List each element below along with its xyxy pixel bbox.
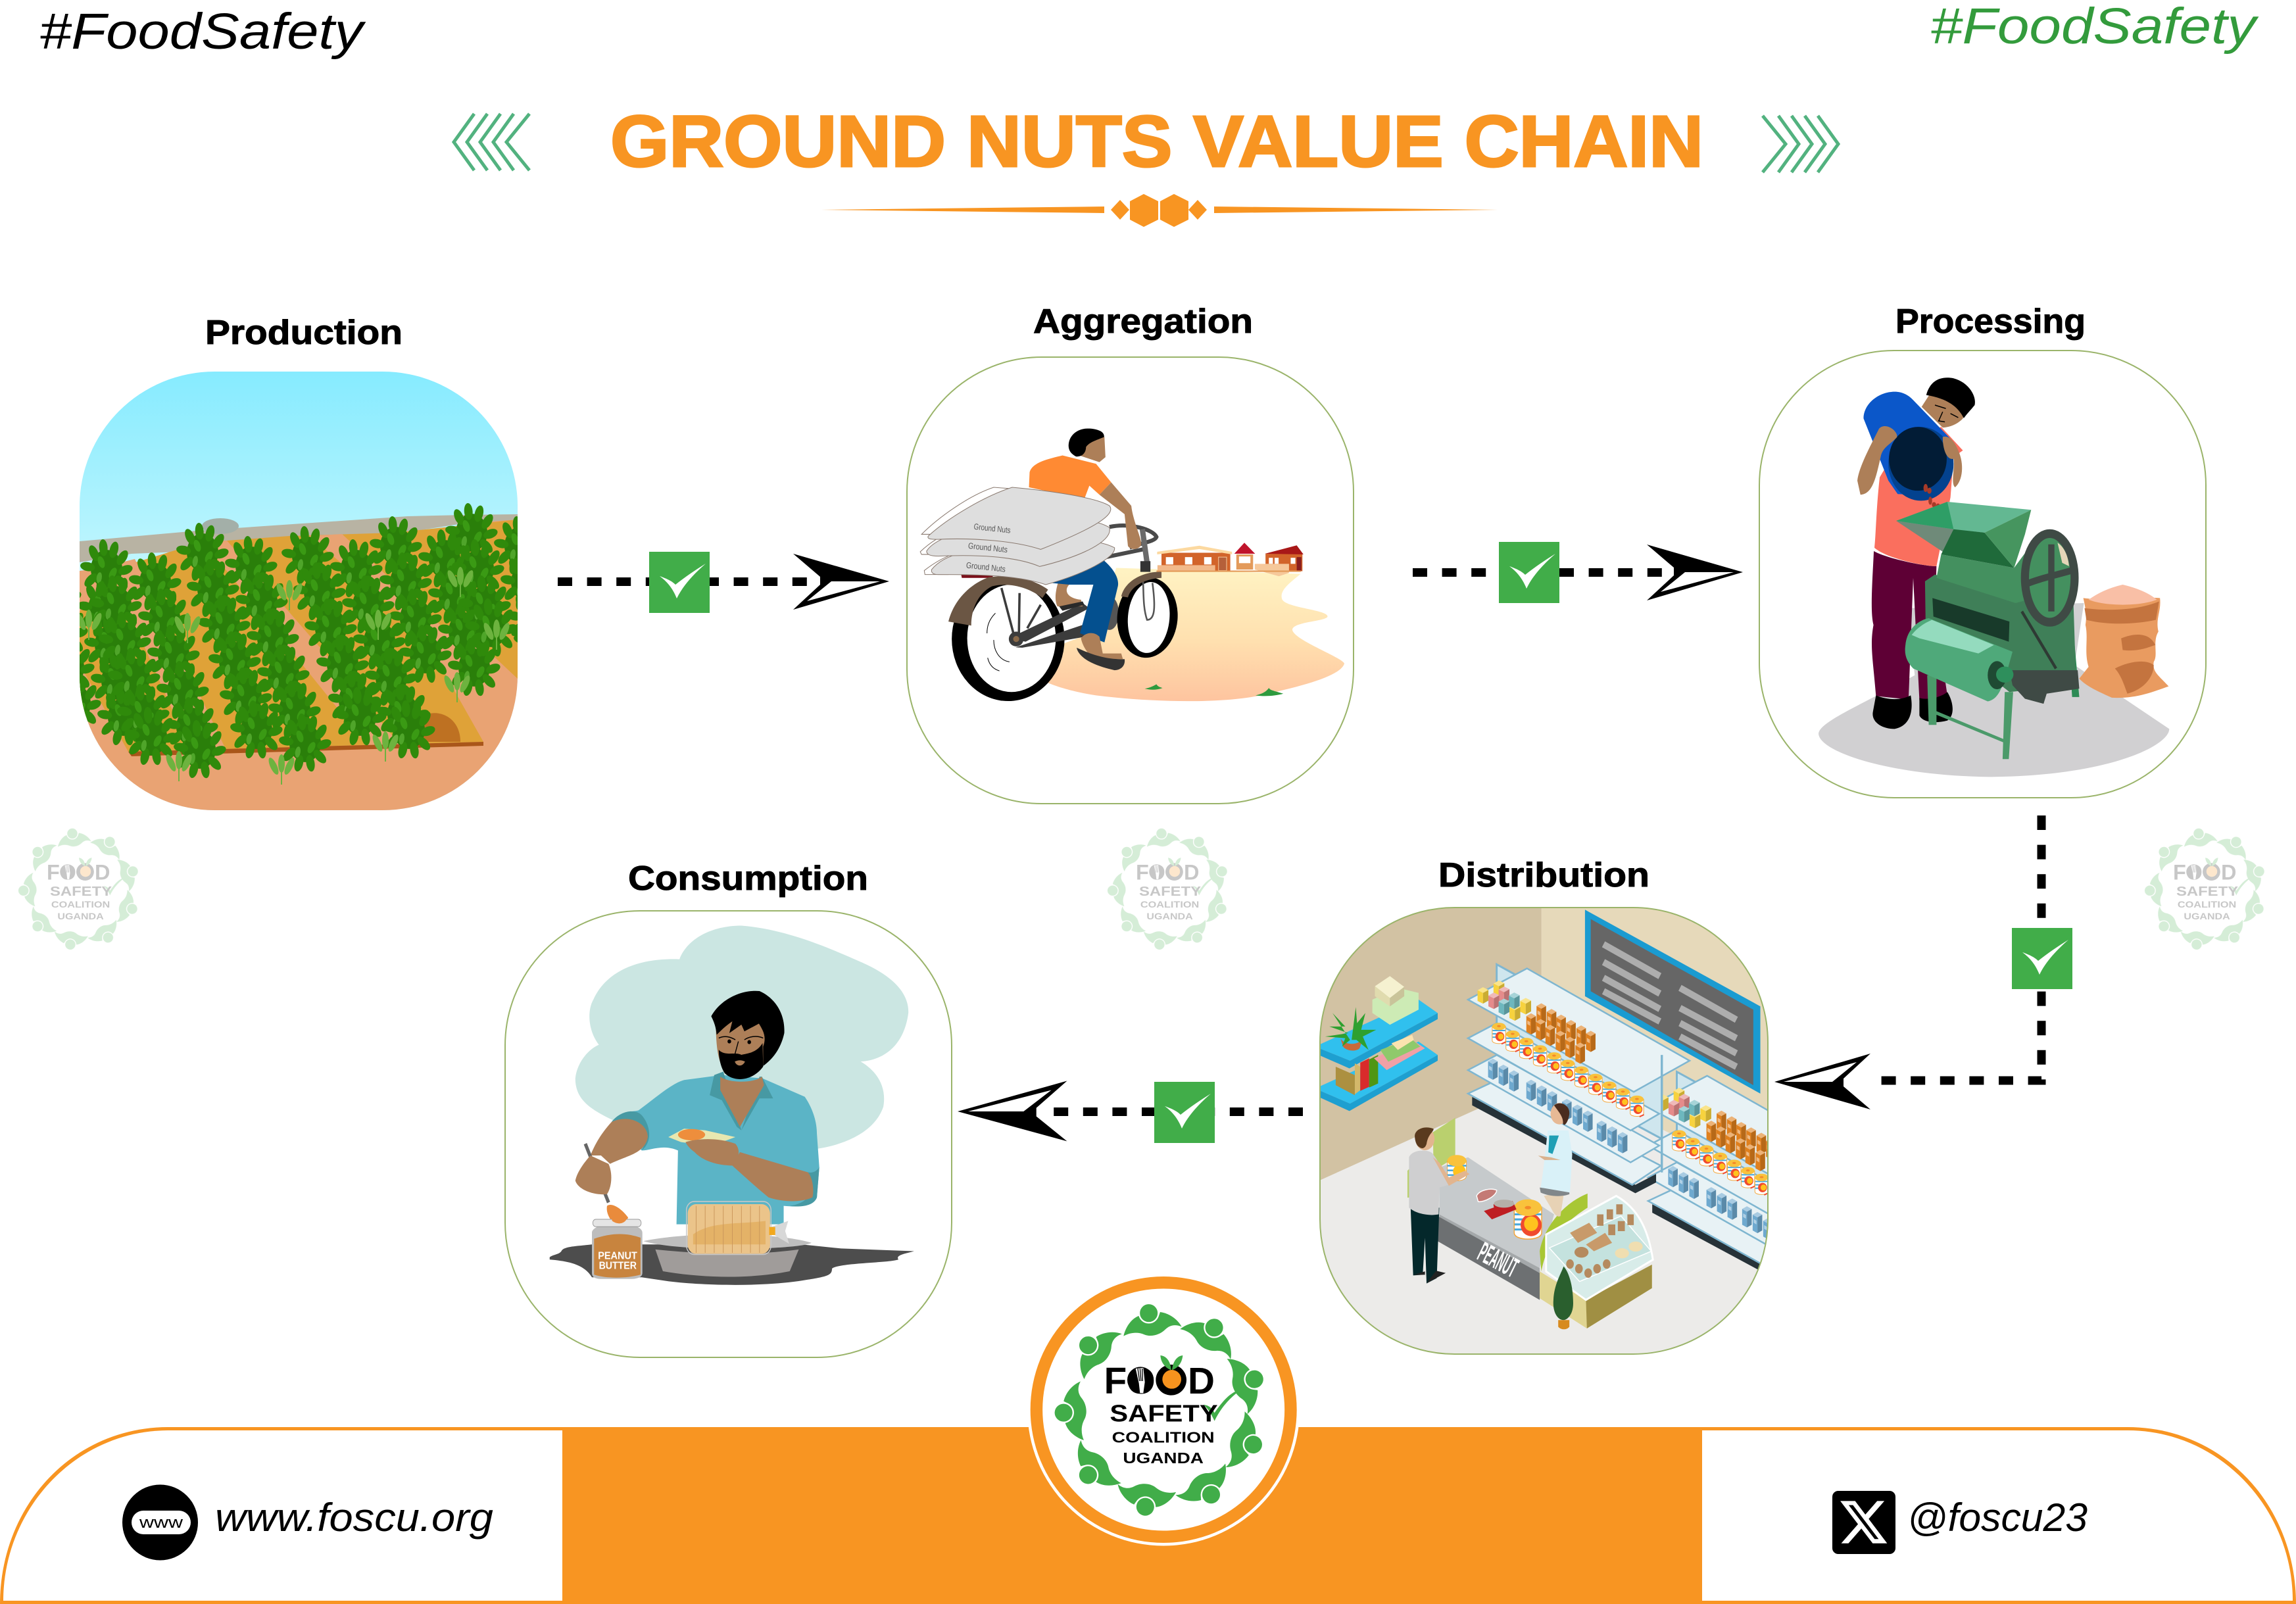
watermark logo: centre bbox=[1106, 828, 1233, 954]
watermark logo: centre: FOOD bbox=[1136, 861, 1199, 885]
social handle: @foscu23 bbox=[1907, 1495, 2088, 1540]
heading: distribution: Distribution bbox=[1438, 856, 1649, 894]
icon: X social bbox=[1832, 1491, 1895, 1554]
logo: Food Safety Coalition Uganda: COALITION bbox=[1112, 1428, 1215, 1446]
logo: Food Safety Coalition Uganda: FOOD bbox=[1104, 1361, 1215, 1402]
heading: aggregation: Aggregation bbox=[1033, 303, 1253, 341]
watermark logo: right: COALITION bbox=[2178, 900, 2236, 910]
panel frame bbox=[505, 911, 952, 1357]
title divider bbox=[821, 194, 1498, 227]
panel: consumption bbox=[505, 860, 952, 1357]
icon: left chevrons bbox=[454, 114, 529, 170]
watermark logo: left bbox=[16, 828, 144, 954]
watermark logo: centre: SAFETY bbox=[1139, 885, 1202, 899]
watermark logo: right: FOOD bbox=[2173, 861, 2236, 885]
arrow: production to aggregation bbox=[558, 552, 889, 613]
illustration: cyclist carrying sacks bbox=[920, 429, 1344, 701]
illustration: man spreading peanut butter: BUTTER bbox=[599, 1260, 637, 1272]
panel: processing bbox=[1759, 303, 2206, 798]
illustration: cyclist carrying sacks: Ground Nuts bbox=[965, 560, 1006, 574]
panel frame bbox=[1759, 351, 2206, 798]
watermark logo: left: COALITION bbox=[51, 900, 110, 910]
title: GROUND NUTS VALUE CHAIN bbox=[610, 101, 1703, 182]
illustration: groundnut field bbox=[80, 372, 518, 810]
heading: processing: Processing bbox=[1895, 303, 2086, 341]
watermark logo: left: SAFETY bbox=[50, 885, 112, 899]
watermark logo: centre: UGANDA bbox=[1146, 911, 1193, 921]
logo: Food Safety Coalition Uganda bbox=[1027, 1273, 1300, 1545]
illustration: peanut shop: PEANUT bbox=[1473, 1236, 1523, 1283]
illustration: worker at groundnut sheller bbox=[1819, 377, 2169, 777]
watermark logo: centre: COALITION bbox=[1140, 900, 1199, 910]
panel: production bbox=[80, 319, 518, 810]
watermark logo: left: FOOD bbox=[47, 861, 110, 885]
panel: distribution bbox=[1319, 862, 1769, 1355]
arrow: processing to distribution bbox=[1774, 815, 2072, 1109]
icon: right chevrons bbox=[1763, 116, 1838, 172]
illustration: man spreading peanut butter bbox=[550, 926, 914, 1285]
illustration: cyclist carrying sacks: Ground Nuts bbox=[973, 522, 1011, 535]
logo: Food Safety Coalition Uganda: UGANDA bbox=[1123, 1449, 1204, 1467]
icon: website bbox=[122, 1485, 198, 1560]
watermark logo: right: SAFETY bbox=[2176, 885, 2239, 899]
hashtag left: #FoodSafety bbox=[39, 3, 366, 60]
watermark logo: right: UGANDA bbox=[2184, 911, 2230, 921]
icon: website: www bbox=[139, 1514, 183, 1532]
illustration: peanut shop bbox=[1321, 908, 1767, 1353]
website address: www.foscu.org bbox=[215, 1495, 493, 1540]
panel frame bbox=[1320, 908, 1768, 1354]
watermark logo: left: UGANDA bbox=[57, 911, 104, 921]
arrow: distribution to consumption bbox=[958, 1081, 1303, 1143]
watermark logo: right bbox=[2143, 828, 2270, 954]
illustration: cyclist carrying sacks: Ground Nuts bbox=[967, 541, 1008, 554]
footer band bbox=[0, 1427, 2296, 1604]
panel: aggregation bbox=[907, 303, 1354, 804]
arrow: aggregation to processing bbox=[1413, 542, 1743, 603]
heading: consumption: Consumption bbox=[628, 860, 868, 898]
logo: Food Safety Coalition Uganda: SAFETY bbox=[1110, 1401, 1218, 1427]
heading: production: Production bbox=[205, 314, 403, 352]
panel frame bbox=[907, 357, 1354, 804]
illustration: man spreading peanut butter: PEANUT bbox=[598, 1250, 638, 1262]
